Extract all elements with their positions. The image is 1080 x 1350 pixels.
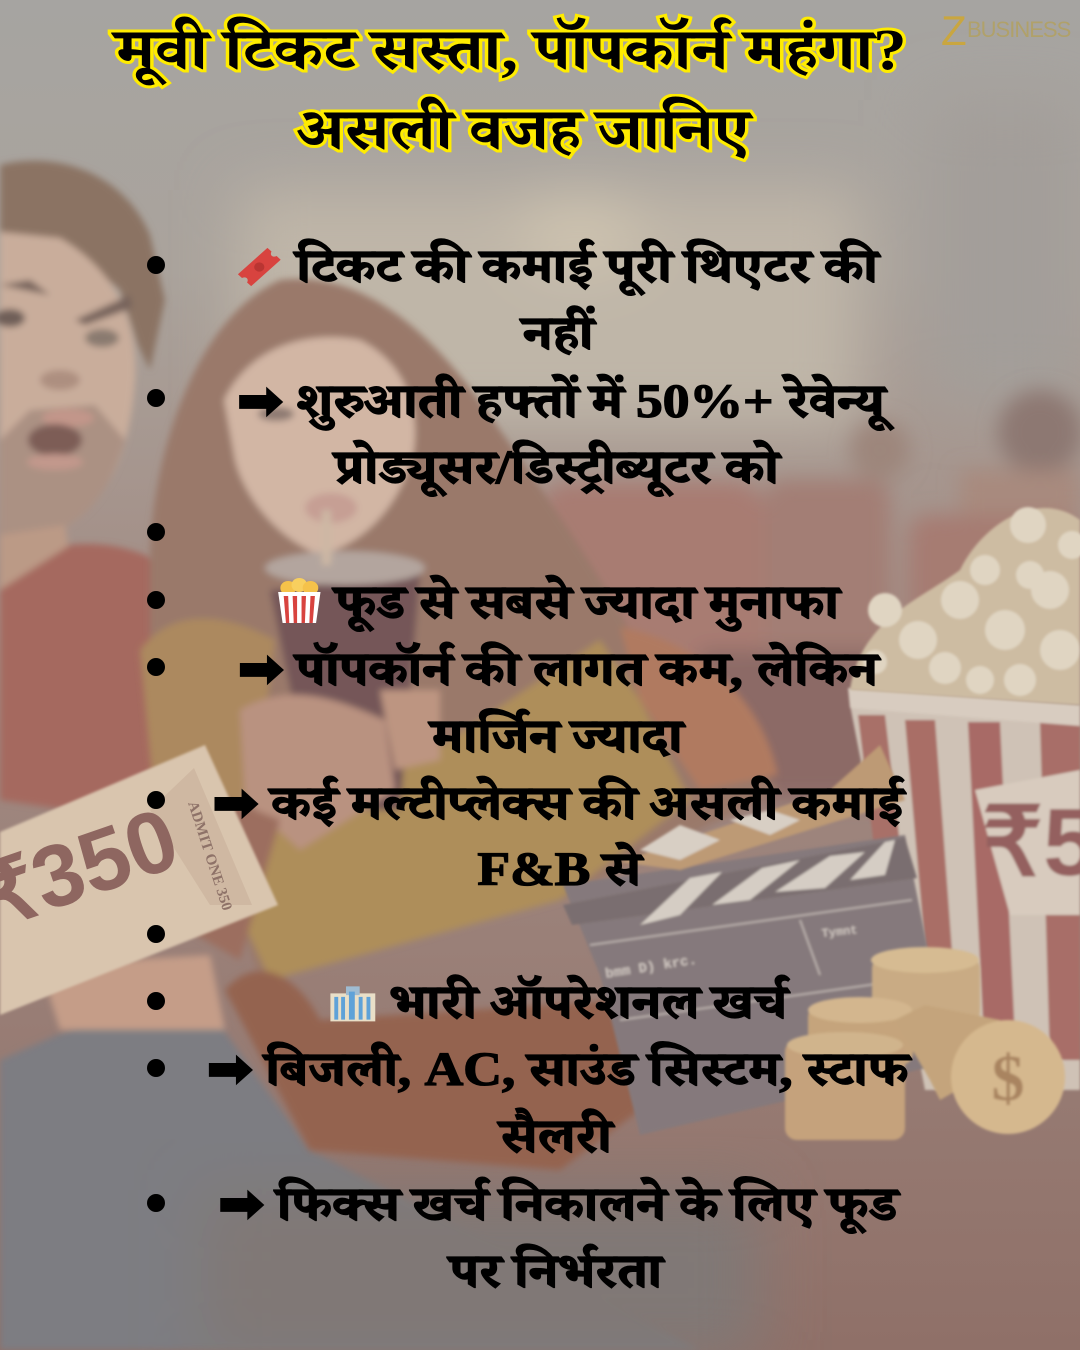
clapperboard: Tymnt: [821, 923, 858, 941]
bullet list: पर निर्भरता: [450, 1245, 662, 1298]
popcorn bucket: [848, 688, 1080, 1090]
logo: [941, 7, 1070, 54]
bullet list: प्रोड्यूसर/डिस्ट्रीब्यूटर को: [335, 441, 779, 494]
title: [108, 14, 907, 162]
point: food: फूड से सबसे ज्यादा मुनाफा: [335, 576, 839, 629]
bullet list: मार्जिन ज्यादा: [431, 710, 683, 763]
bullet list: सैलरी: [500, 1110, 612, 1163]
woman: [40, 279, 780, 1170]
title: असली वजह जानिए: [296, 97, 750, 162]
point: ticket: टिकट की कमाई पूरी थिएटर की: [297, 240, 878, 293]
clapperboard: [563, 745, 960, 1135]
coins: $: [992, 1042, 1024, 1115]
bullet list: F&B से: [477, 843, 641, 896]
ticket: ADMIT ONE 350: [184, 799, 235, 913]
bullet list: नहीं: [523, 307, 593, 360]
logo: Z: [941, 7, 967, 54]
point: revenue: ➡ शुरुआती हफ्तों में 50%+ रेवेन्यू: [238, 375, 884, 428]
point: operations: भारी ऑपरेशनल खर्च: [389, 976, 787, 1029]
man: [0, 161, 760, 1350]
ticket: [0, 745, 278, 1015]
bullet list: ➡ कई मल्टीप्लेक्स की असली कमाई: [213, 777, 903, 830]
bullet list: ➡ फिक्स खर्च निकालने के लिए फूड: [219, 1178, 897, 1231]
bullet list: ➡ बिजली, AC, साउंड सिस्टम, स्टाफ: [207, 1043, 909, 1096]
clapperboard: bmm D) krc.: [604, 953, 698, 983]
bullet list: [147, 238, 912, 1298]
bullet list: ➡ पॉपकॉर्न की लागत कम, लेकिन: [238, 643, 878, 696]
coins: [785, 947, 1065, 1140]
title: मूवी टिकट सस्ता, पॉपकॉर्न महंगा?: [115, 17, 907, 82]
popcorn pile: [850, 507, 1080, 705]
cinema seats and back-row heads: [540, 390, 1080, 800]
logo: BUSINESS: [967, 17, 1070, 42]
